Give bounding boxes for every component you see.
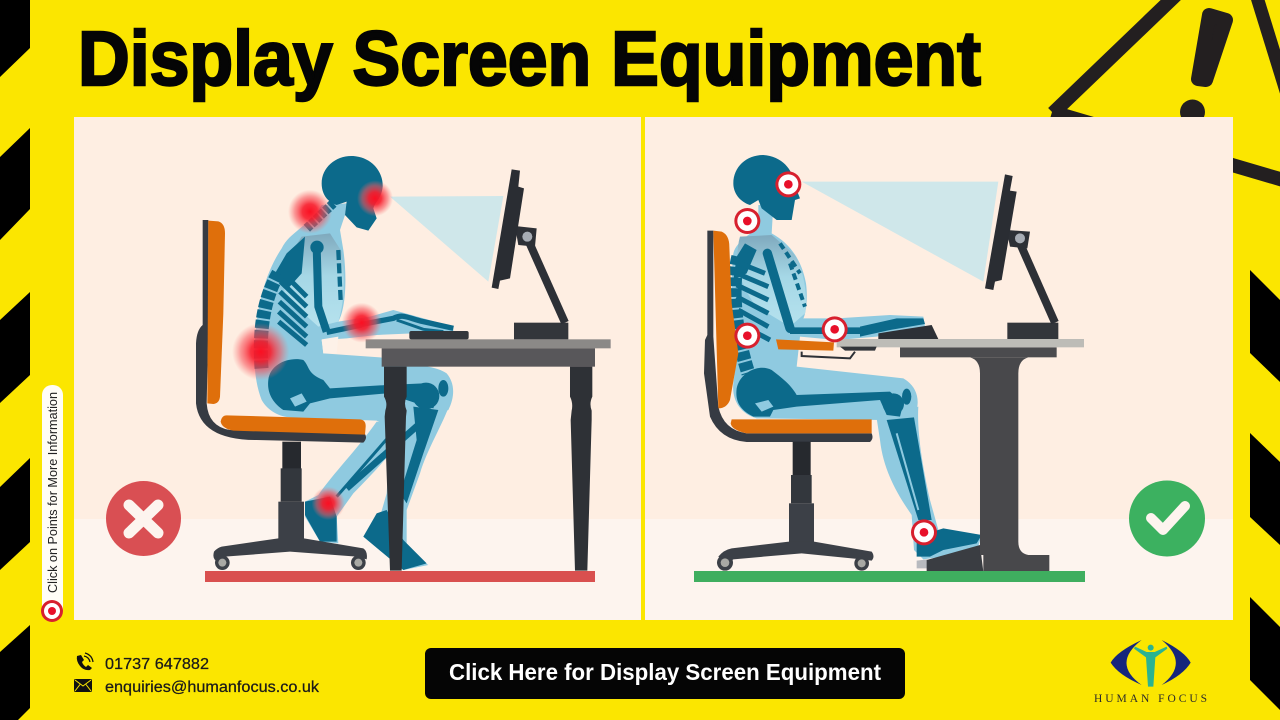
skeleton bones bbox=[268, 156, 448, 570]
illustration: upright skeleton at desk bbox=[704, 155, 1084, 572]
line of sight cone bbox=[802, 182, 998, 282]
pain hotspots bbox=[232, 180, 393, 520]
armrest bbox=[776, 339, 855, 358]
office chair bbox=[196, 220, 367, 570]
phone number: 01737 647882 bbox=[105, 656, 209, 673]
keyboard bbox=[840, 325, 938, 351]
logo: Human Focus bbox=[1094, 640, 1207, 705]
icon: red cross badge bbox=[106, 481, 181, 556]
hint text: Click on Points for More Information bbox=[45, 392, 60, 593]
button label: Click Here for Display Screen Equipment bbox=[449, 659, 881, 685]
green floor bar bbox=[694, 571, 1085, 582]
monitor bbox=[492, 169, 568, 339]
left hazard stripes bbox=[0, 0, 30, 720]
logo eye and figure bbox=[1111, 640, 1191, 687]
red floor bar bbox=[205, 571, 595, 582]
icon: phone bbox=[77, 653, 93, 670]
icon: warning triangle bbox=[1052, 0, 1280, 182]
illustration: slouched skeleton at desk bbox=[196, 156, 611, 571]
monitor bbox=[985, 174, 1058, 339]
footrest bbox=[917, 545, 983, 572]
icon: envelope bbox=[74, 679, 92, 692]
logo wordmark: HUMAN FOCUS bbox=[1094, 693, 1207, 705]
icon: green check badge bbox=[1129, 480, 1205, 556]
line of sight cone bbox=[390, 196, 503, 282]
clickable target points bbox=[734, 171, 937, 545]
right hazard stripes bbox=[1250, 270, 1280, 710]
button bbox=[425, 648, 905, 699]
keyboard bbox=[409, 331, 469, 339]
title: Display Screen Equipment bbox=[78, 16, 981, 102]
email address: enquiries@humanfocus.co.uk bbox=[105, 679, 319, 696]
icon: target bbox=[41, 600, 63, 622]
skeleton bones bbox=[733, 155, 982, 557]
panel: incorrect posture bbox=[74, 117, 641, 620]
desk bbox=[837, 339, 1084, 572]
panel: correct posture bbox=[645, 117, 1233, 620]
contact details bbox=[74, 653, 319, 696]
desk bbox=[366, 339, 611, 571]
side hint pill bbox=[41, 385, 63, 622]
body silhouette bbox=[254, 203, 453, 570]
office chair bbox=[704, 231, 873, 571]
body silhouette bbox=[732, 205, 982, 559]
